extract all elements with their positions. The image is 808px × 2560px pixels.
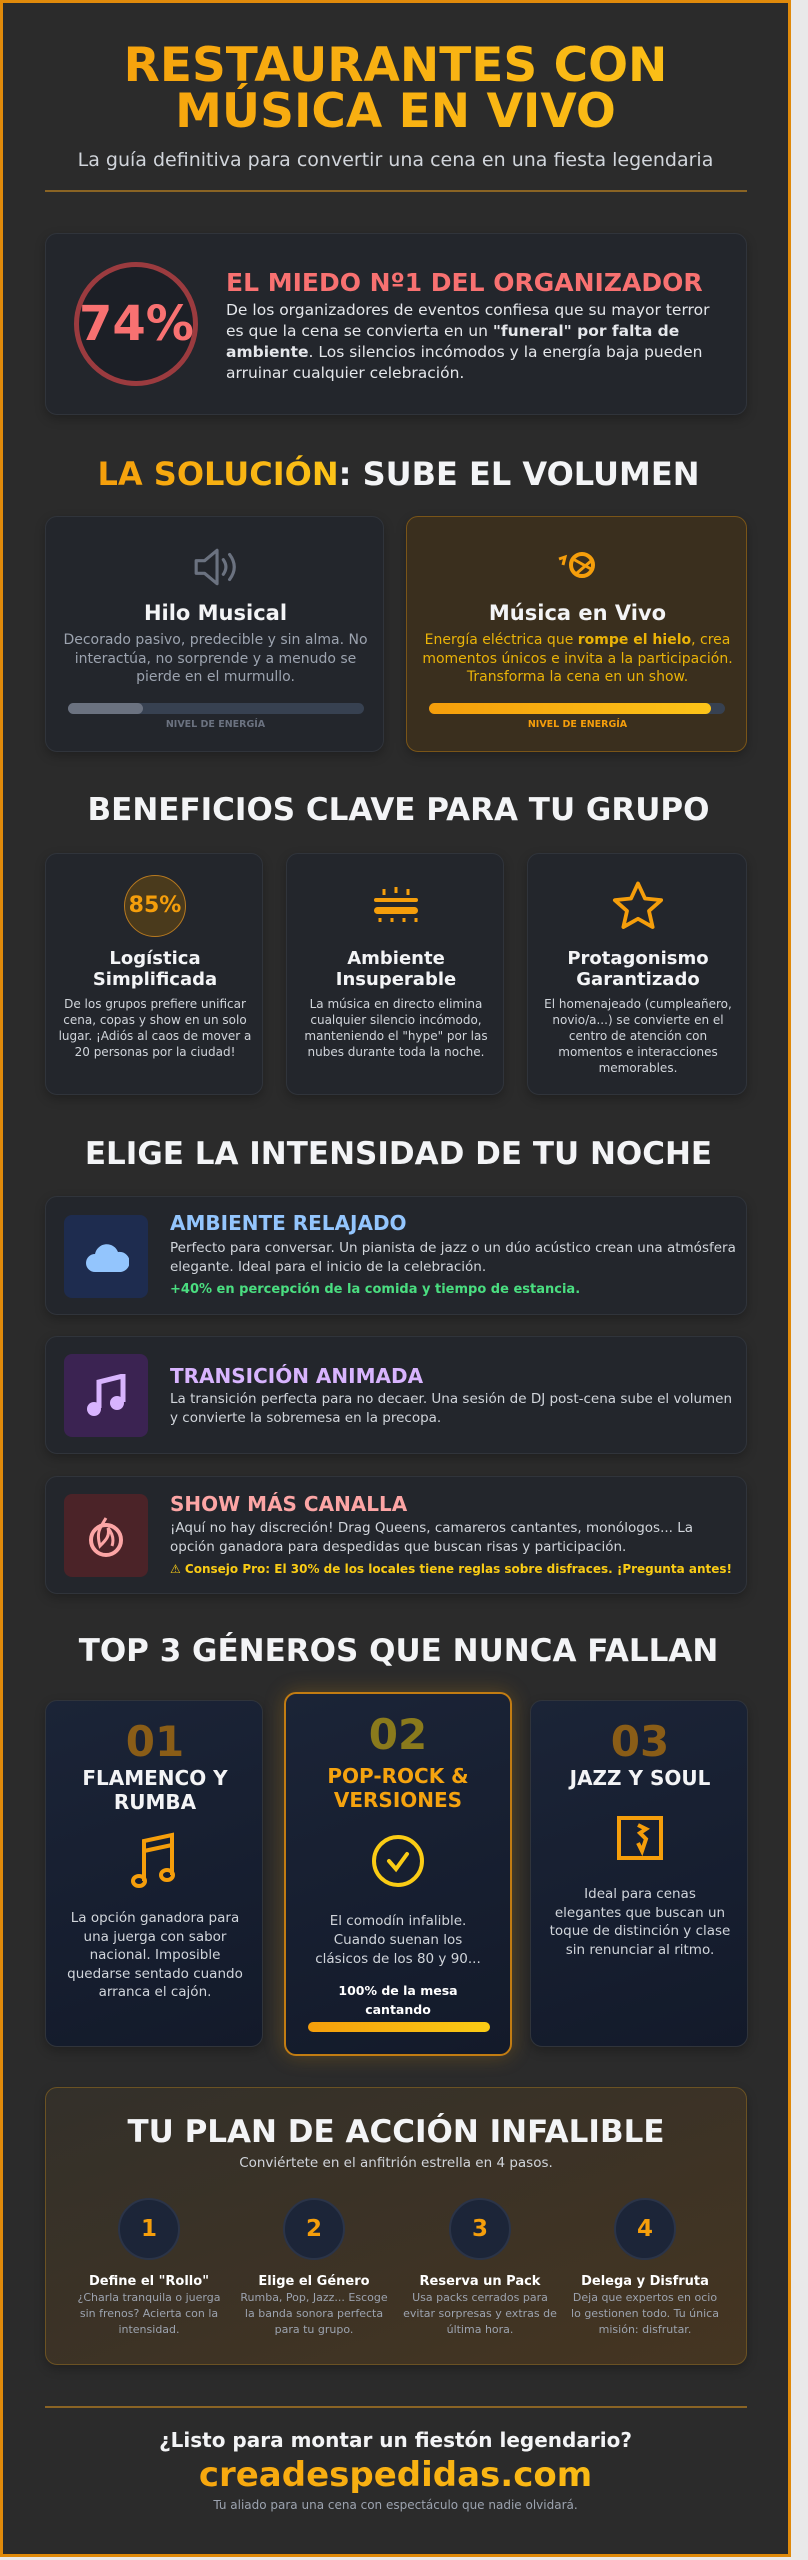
heading: intensidad: ELIGE LA INTENSIDAD DE TU NOCHE <box>85 1136 712 1172</box>
description: De los grupos prefiere unificar cena, copas y show en un solo lugar. ¡Adiós al caos de mover a 20 personas por la ciudad! <box>59 997 251 1059</box>
panel: plan de acción <box>45 2087 747 2365</box>
title: Garantizado <box>576 969 700 990</box>
description: El comodín infalible. Cuando suenan los clásicos de los 80 y 90... <box>315 1913 481 1967</box>
step 2: Elige el Género <box>258 2274 370 2289</box>
step 2 <box>240 2198 388 2336</box>
panel: protagonismo <box>527 853 747 1095</box>
number: 01 <box>126 1717 184 1766</box>
stat 85%: 85% <box>129 893 181 918</box>
panel: pop-rock <box>284 1692 512 2056</box>
footer CTA: creadespedidas.com <box>199 2455 592 2495</box>
text: La transición perfecta para no decaer. Una sesión de DJ post-cena sube el volumen y convierte la sobremesa en la precopa. <box>170 1391 732 1426</box>
title: Música en Vivo <box>489 601 666 625</box>
step 2: Rumba, Pop, Jazz... Escoge la banda sonora perfecta para tu grupo. <box>240 2291 388 2336</box>
step 4: Delega y Disfruta <box>581 2274 709 2289</box>
icon: cloud <box>64 1215 148 1298</box>
icon: speaker <box>194 548 236 586</box>
text: ¡Aquí no hay discreción! Drag Queens, camareros cantantes, monólogos... La opción ganadora para despedidas que buscan risas y participación. <box>170 1520 693 1554</box>
title: Logística <box>109 948 201 969</box>
genre title <box>82 1766 228 1814</box>
step 2: 2 <box>306 2216 322 2242</box>
icon: music note <box>64 1354 148 1437</box>
panel: hilo musical <box>45 516 384 752</box>
footer CTA: ¿Listo para montar un fiestón legendario? <box>159 2428 632 2452</box>
panel: música en vivo: NIVEL DE ENERGÍA <box>528 719 627 730</box>
panel: show canalla <box>45 1476 747 1594</box>
heading: EL MIEDO Nº1 DEL ORGANIZADOR <box>226 268 703 297</box>
energy bar low <box>68 703 364 714</box>
subheading: Conviértete en el anfitrión estrella en 4 pasos. <box>239 2155 553 2171</box>
icon: star <box>612 882 664 929</box>
text: Perfecto para conversar. Un pianista de jazz o un dúo acústico crean una atmósfera elegante. Ideal para el inicio de la celebración. <box>170 1240 736 1274</box>
heading: TU PLAN DE ACCIÓN INFALIBLE <box>127 2114 665 2150</box>
stat circle 74%: 74% <box>79 296 194 352</box>
stat: +40% en percepción de la comida y tiempo de estancia. <box>170 1282 580 1297</box>
description: La música en directo elimina cualquier silencio incómodo, manteniendo el "hype" por las nubes durante toda la noche. <box>304 997 488 1059</box>
panel: jazz <box>530 1700 748 2047</box>
icon: live music <box>558 552 595 578</box>
icon: notes <box>131 1832 175 1888</box>
panel: fear <box>45 233 747 415</box>
icon: check circle <box>372 1835 424 1887</box>
heading: beneficios: BENEFICIOS CLAVE PARA TU GRUPO <box>88 792 709 828</box>
title <box>336 948 456 990</box>
panel: música en vivo <box>406 516 747 752</box>
stat circle 74% <box>74 262 198 386</box>
title: Ambiente <box>347 948 445 969</box>
icon: jazz frame <box>617 1816 663 1860</box>
title: Simplificada <box>93 969 217 990</box>
panel: transición <box>45 1336 747 1454</box>
body text: De los organizadores de eventos confiesa que su mayor terror es que la cena se convierta en un "funeral" por falta de ambiente. Los silencios incómodos y la energía baja pueden arruinar cualquier celebración. <box>226 301 709 382</box>
title: Insuperable <box>336 969 456 990</box>
title: SHOW MÁS CANALLA <box>170 1492 407 1516</box>
footer CTA: Tu aliado para una cena con espectáculo que nadie olvidará. <box>213 2498 578 2512</box>
step 4: 4 <box>637 2216 653 2242</box>
step 1: 1 <box>141 2216 157 2242</box>
title: MÚSICA EN VIVO <box>175 84 616 139</box>
panel: ambiente <box>286 853 504 1095</box>
step 4 <box>571 2198 719 2336</box>
genre title: FLAMENCO Y <box>82 1766 228 1790</box>
genre title <box>327 1764 469 1812</box>
step 3 <box>403 2198 557 2336</box>
description: La opción ganadora para una juerga con sabor nacional. Imposible quedarse sentado cuando arranca el cajón. <box>67 1910 243 2000</box>
icon: fire <box>64 1494 148 1577</box>
description: El homenajeado (cumpleañero, novio/a...) se convierte en el centro de atención con momentos e interacciones memorables. <box>544 997 732 1075</box>
panel: ambiente relajado <box>45 1196 747 1315</box>
description: Decorado pasivo, predecible y sin alma. No interactúa, no sorprende y a menudo se pierde en el murmullo. <box>63 632 368 685</box>
heading: solución: LA SOLUCIÓN: SUBE EL VOLUMEN <box>97 455 700 493</box>
step 1 <box>78 2198 220 2336</box>
genre title: VERSIONES <box>334 1788 462 1812</box>
panel: logística <box>45 853 263 1095</box>
description: Energía eléctrica que rompe el hielo, crea momentos únicos e invita a la participación. Transforma la cena en un show. <box>422 632 733 685</box>
title: Hilo Musical <box>144 601 287 625</box>
energy bar high <box>429 703 725 714</box>
title: Protagonismo <box>567 948 709 969</box>
tip: ⚠ Consejo Pro: El 30% de los locales tiene reglas sobre disfraces. ¡Pregunta antes! <box>170 1562 732 1576</box>
bar <box>308 2022 490 2032</box>
genre title: POP-ROCK & <box>327 1764 469 1788</box>
genre title: JAZZ Y SOUL <box>570 1766 710 1790</box>
title <box>3 43 788 135</box>
icon: stage lights <box>374 887 418 922</box>
number: 03 <box>611 1717 669 1766</box>
stat: cantando <box>365 2002 431 2017</box>
description: Ideal para cenas elegantes que buscan un toque de distinción y clase sin renunciar al ritmo. <box>550 1886 730 1958</box>
subtitle: La guía definitiva para convertir una cena en una fiesta legendaria <box>78 149 713 171</box>
footer CTA <box>159 2428 632 2512</box>
panel: hilo musical: NIVEL DE ENERGÍA <box>166 719 265 730</box>
stat <box>338 1983 458 2017</box>
stat 85% <box>124 875 186 937</box>
step 3: Reserva un Pack <box>420 2274 540 2289</box>
step 1: ¿Charla tranquila o juerga sin frenos? Acierta con la intensidad. <box>78 2291 220 2336</box>
title <box>93 948 217 990</box>
title: AMBIENTE RELAJADO <box>170 1211 407 1235</box>
step 3: Usa packs cerrados para evitar sorpresas y extras de última hora. <box>403 2291 557 2336</box>
genre title: RUMBA <box>114 1790 196 1814</box>
title <box>567 948 709 990</box>
title: TRANSICIÓN ANIMADA <box>170 1364 423 1388</box>
panel: flamenco <box>45 1700 263 2047</box>
step 4: Deja que expertos en ocio lo gestionen todo. Tu única misión: disfrutar. <box>571 2291 719 2336</box>
heading: géneros: TOP 3 GÉNEROS QUE NUNCA FALLAN <box>79 1633 718 1669</box>
number: 02 <box>369 1710 427 1759</box>
step 1: Define el "Rollo" <box>89 2274 209 2289</box>
title: RESTAURANTES CON <box>124 38 667 93</box>
step 3: 3 <box>472 2216 488 2242</box>
stat: 100% de la mesa <box>338 1983 458 1998</box>
